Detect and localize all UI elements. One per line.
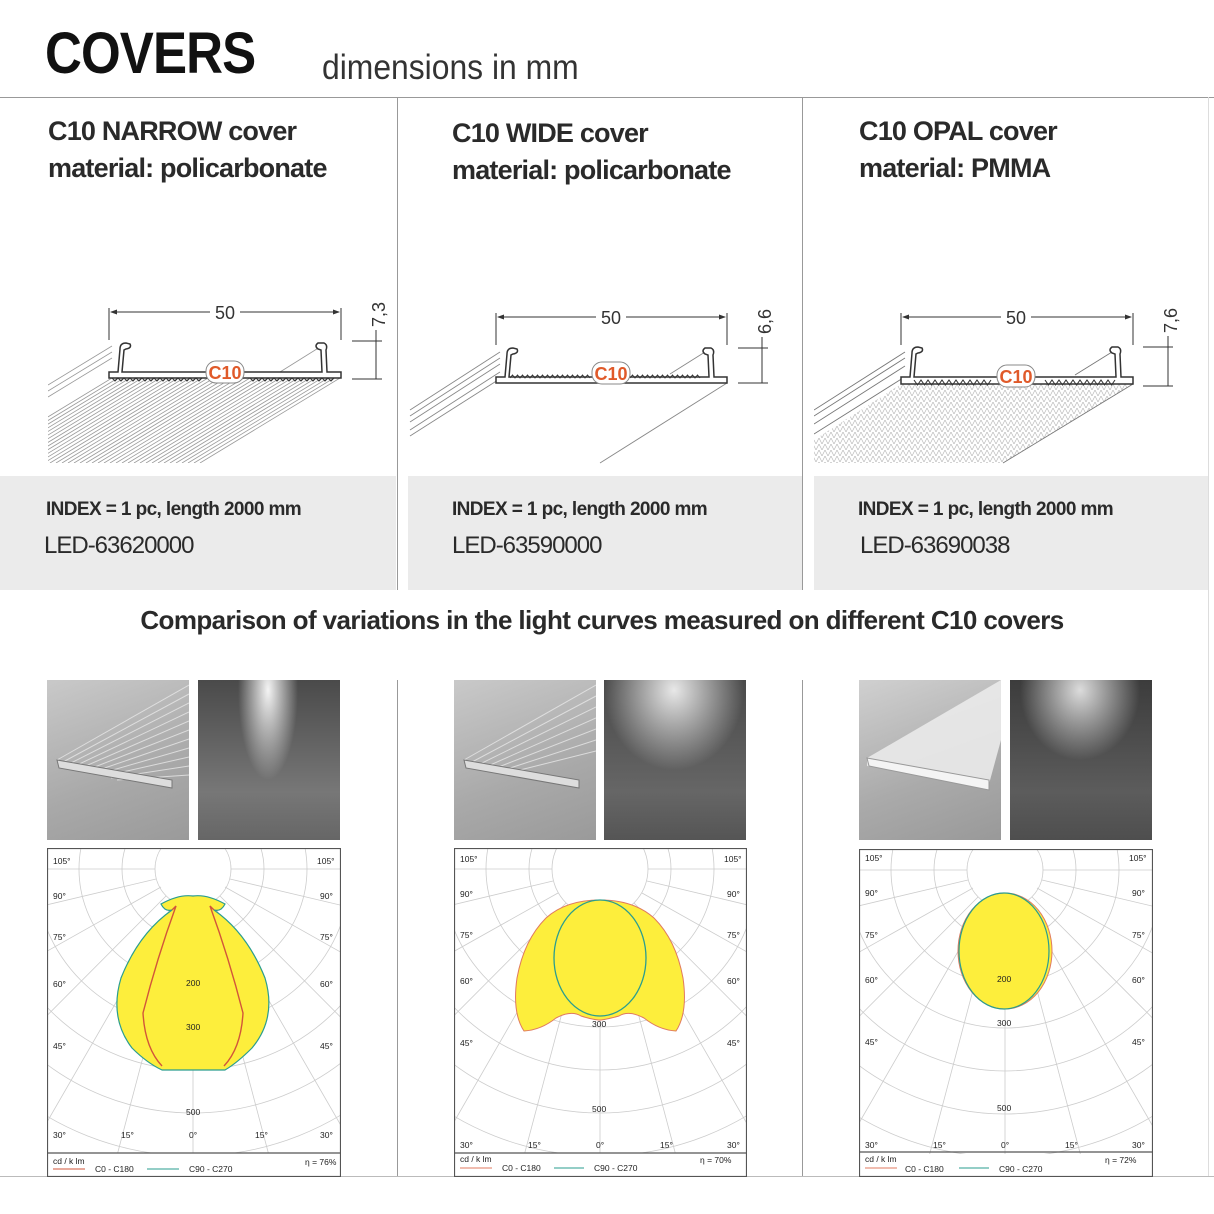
heading: opal: material: PMMA: [859, 153, 1050, 183]
chart: opal polar: 75°: [1132, 930, 1145, 940]
heading: wide: material: policarbonate: [452, 155, 731, 185]
band: wide index: [408, 476, 802, 590]
chart: narrow polar: η = 76%: [305, 1157, 337, 1167]
chart: wide polar: 15°: [528, 1140, 541, 1150]
title: COVERS: [45, 21, 255, 86]
band: opal index: INDEX = 1 pc, length 2000 mm: [858, 499, 1113, 520]
chart: narrow polar: 15°: [121, 1130, 134, 1140]
chart: wide polar: 500: [592, 1104, 606, 1114]
chart: narrow polar: 75°: [53, 932, 66, 942]
chart: wide polar: 0°: [596, 1140, 604, 1150]
drawing: wide profile: 6,6: [755, 309, 775, 334]
chart: narrow polar: [47, 848, 341, 1177]
chart: narrow polar: 0°: [189, 1130, 197, 1140]
heading: opal: C10 OPAL cover: [859, 116, 1057, 146]
heading: wide: C10 WIDE cover: [452, 118, 648, 148]
drawing: wide profile: C10: [594, 364, 628, 384]
drawing: narrow profile: C10: [208, 363, 242, 383]
chart: opal polar: η = 72%: [1105, 1155, 1137, 1165]
chart: narrow polar: 30°: [53, 1130, 66, 1140]
drawing: narrow profile: 7,3: [369, 302, 389, 327]
chart: opal polar: 30°: [865, 1140, 878, 1150]
photo: wide cover: [454, 680, 596, 840]
chart: opal polar: C90 - C270: [999, 1164, 1043, 1174]
chart: opal polar: 15°: [1065, 1140, 1078, 1150]
heading: comparison: Comparison of variations in the light curves measured on different C10 covers: [140, 605, 1064, 635]
chart: opal polar: 60°: [1132, 975, 1145, 985]
chart: opal polar: 45°: [865, 1037, 878, 1047]
chart: narrow polar: 15°: [255, 1130, 268, 1140]
chart: opal polar: 75°: [865, 930, 878, 940]
chart: narrow polar: 75°: [320, 932, 333, 942]
chart: opal polar: 0°: [1001, 1140, 1009, 1150]
chart: narrow polar: 30°: [320, 1130, 333, 1140]
chart: opal polar: 45°: [1132, 1037, 1145, 1047]
heading: wide: [452, 118, 731, 185]
chart: wide polar: 105°: [460, 854, 478, 864]
chart: narrow polar: 105°: [317, 856, 335, 866]
subtitle: dimensions in mm: [322, 48, 579, 87]
chart: wide polar: 45°: [727, 1038, 740, 1048]
chart: opal polar: 60°: [865, 975, 878, 985]
chart: opal polar: 105°: [865, 853, 883, 863]
chart: wide polar: 30°: [727, 1140, 740, 1150]
chart: wide polar: C0 - C180: [502, 1163, 541, 1173]
drawing: opal profile: 50: [1006, 308, 1026, 328]
chart: wide polar: 75°: [727, 930, 740, 940]
chart: opal polar: 500: [997, 1103, 1011, 1113]
band: narrow index: INDEX = 1 pc, length 2000 mm: [46, 499, 301, 520]
heading: narrow: C10 NARROW cover: [48, 116, 296, 146]
band: opal index: LED-63690038: [860, 532, 1009, 559]
photo: opal cover: [859, 680, 1001, 840]
photo: narrow cover: [47, 680, 189, 840]
chart: narrow polar: 45°: [320, 1041, 333, 1051]
chart: narrow polar: 200: [186, 978, 200, 988]
chart: wide polar: C90 - C270: [594, 1163, 638, 1173]
chart: narrow polar: C90 - C270: [189, 1164, 233, 1174]
photo: opal light: [1010, 680, 1152, 840]
chart: narrow polar: 90°: [320, 891, 333, 901]
photo: wide light: [604, 680, 746, 840]
drawing: opal profile: [814, 308, 1181, 464]
heading: opal: [859, 116, 1058, 183]
drawing: opal profile: C10: [999, 367, 1033, 387]
chart: narrow polar: 60°: [53, 979, 66, 989]
chart: opal polar: 200: [997, 974, 1011, 984]
drawing: wide profile: 50: [601, 308, 621, 328]
chart: narrow polar: 60°: [320, 979, 333, 989]
chart: narrow polar: cd / k lm: [53, 1156, 85, 1166]
drawing: narrow profile: [48, 302, 389, 463]
chart: opal polar: 30°: [1132, 1140, 1145, 1150]
band: wide index: INDEX = 1 pc, length 2000 mm: [452, 499, 707, 520]
chart: opal polar: 90°: [1132, 888, 1145, 898]
chart: wide polar: 300: [592, 1019, 606, 1029]
panel: narrow cover: [48, 116, 389, 463]
chart: opal polar: C0 - C180: [905, 1164, 944, 1174]
chart: narrow polar: C0 - C180: [95, 1164, 134, 1174]
chart: opal polar: 90°: [865, 888, 878, 898]
drawing: narrow profile: 50: [215, 303, 235, 323]
chart: narrow polar: 45°: [53, 1041, 66, 1051]
chart: wide polar: 45°: [460, 1038, 473, 1048]
chart: wide polar: 15°: [660, 1140, 673, 1150]
chart: wide polar: 60°: [727, 976, 740, 986]
panel: opal cover: [814, 116, 1181, 464]
chart: wide polar: η = 70%: [700, 1155, 732, 1165]
chart: wide polar: 90°: [460, 889, 473, 899]
heading: narrow: [48, 116, 327, 183]
drawing: opal profile: 7,6: [1161, 308, 1181, 333]
photo: narrow light: [198, 680, 340, 840]
chart: narrow polar: 90°: [53, 891, 66, 901]
chart: opal polar: 15°: [933, 1140, 946, 1150]
chart: wide polar: [454, 848, 747, 1177]
drawing: wide profile: [410, 308, 775, 464]
chart: wide polar: 90°: [727, 889, 740, 899]
chart: narrow polar: 105°: [53, 856, 71, 866]
band: narrow index: LED-63620000: [44, 532, 193, 559]
chart: wide polar: 75°: [460, 930, 473, 940]
chart: opal polar: cd / k lm: [865, 1154, 897, 1164]
band: opal index: [814, 476, 1208, 590]
chart: opal polar: [859, 849, 1153, 1177]
band: wide index: LED-63590000: [452, 532, 601, 559]
heading: narrow: material: policarbonate: [48, 153, 327, 183]
chart: wide polar: 60°: [460, 976, 473, 986]
band: narrow index: [0, 476, 396, 590]
chart: narrow polar: 300: [186, 1022, 200, 1032]
panel: wide cover: [410, 118, 775, 464]
chart: wide polar: cd / k lm: [460, 1154, 492, 1164]
chart: wide polar: 30°: [460, 1140, 473, 1150]
chart: narrow polar: 500: [186, 1107, 200, 1117]
chart: opal polar: 300: [997, 1018, 1011, 1028]
chart: wide polar: 105°: [724, 854, 742, 864]
chart: opal polar: 105°: [1129, 853, 1147, 863]
